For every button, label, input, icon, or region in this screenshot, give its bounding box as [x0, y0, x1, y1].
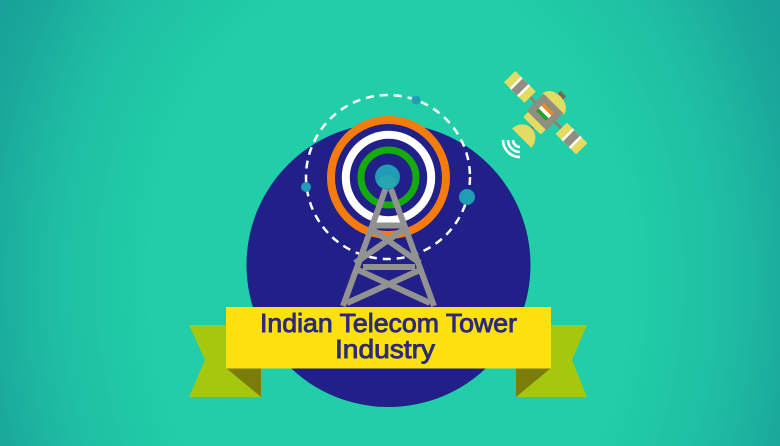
solar panel: upper left — [504, 71, 536, 103]
navy circle — [246, 123, 530, 407]
ribbon tail: right — [516, 325, 587, 397]
banner — [226, 307, 551, 368]
solar panel: lower right — [556, 123, 587, 154]
signal waves — [503, 140, 520, 157]
tower beacon — [375, 164, 400, 190]
tricolour signal rings — [331, 120, 446, 235]
orbit dot: right — [459, 189, 475, 205]
title: Indian Telecom Tower — [260, 308, 517, 338]
orbit dot: top — [412, 96, 420, 104]
satellite body — [485, 58, 600, 174]
dashed orbit — [301, 95, 475, 259]
title — [260, 308, 517, 364]
icon: satellite — [485, 58, 600, 174]
tower mast — [343, 189, 434, 306]
title: Industry — [335, 334, 435, 364]
ribbon tail: left — [189, 325, 261, 397]
orbit dot: left — [301, 182, 311, 192]
